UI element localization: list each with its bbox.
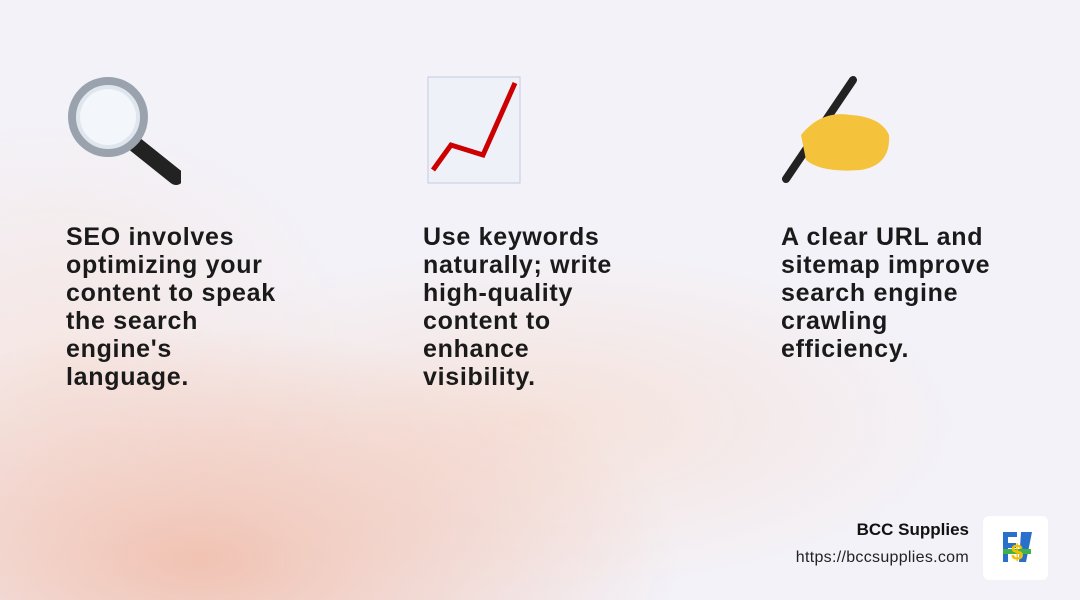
text: SEO: language.	[66, 363, 189, 391]
logo: $	[1011, 540, 1023, 565]
text: URL: search engine	[781, 279, 958, 307]
text: keywords: naturally; write	[423, 251, 612, 279]
text: keywords: high-quality	[423, 279, 573, 307]
text: SEO: optimizing your	[66, 251, 263, 279]
text: SEO	[66, 223, 276, 391]
text: SEO: SEO involves	[66, 223, 234, 251]
icon: magnifying glass	[68, 77, 181, 185]
text: keywords: enhance	[423, 335, 529, 363]
text: URL: A clear URL and	[781, 223, 983, 251]
column: URL	[781, 76, 990, 363]
column: SEO	[66, 77, 276, 391]
text: keywords: visibility.	[423, 363, 536, 391]
footer: brand: BCC Supplies	[857, 520, 969, 539]
footer: brand: https://bccsupplies.com	[796, 549, 969, 566]
text: SEO: engine's	[66, 335, 172, 363]
text: URL: efficiency.	[781, 335, 909, 363]
footer: brand	[796, 520, 969, 566]
text: URL	[781, 223, 990, 363]
text: keywords: Use keywords	[423, 223, 600, 251]
column: keywords	[423, 76, 612, 391]
text: URL: sitemap improve	[781, 251, 990, 279]
icon: writing hand	[782, 76, 890, 183]
text: SEO: the search	[66, 307, 198, 335]
text: keywords	[423, 223, 612, 391]
text: keywords: content to	[423, 307, 551, 335]
text: URL: crawling	[781, 307, 888, 335]
logo	[983, 516, 1048, 580]
icon: chart	[428, 76, 520, 184]
text: SEO: content to speak	[66, 279, 276, 307]
